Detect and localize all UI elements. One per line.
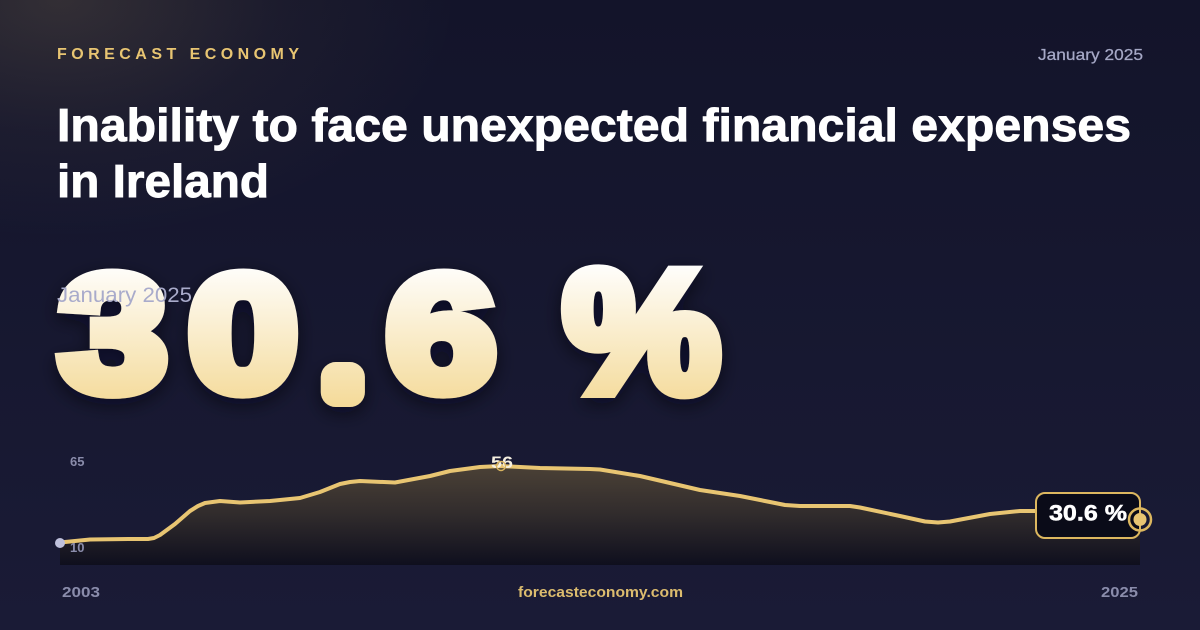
latest value callout [1036,493,1140,538]
latest value callout: 30.6 % [1049,500,1127,526]
y axis max: 65 [70,454,84,469]
sparkline chart [55,453,1151,565]
headline value: % [564,236,720,428]
headline value: . [329,302,357,414]
latest value marker [1129,508,1151,530]
title [57,99,1131,207]
headline value: 6 [386,242,496,425]
y axis min: 10 [70,540,84,555]
overlapping date label: January 2025 [57,284,192,307]
start marker [55,538,65,548]
source url: forecasteconomy.com [518,584,683,601]
date top right: January 2025 [1038,47,1143,64]
chart line [60,466,1040,542]
peak marker [496,462,506,470]
headline value [59,236,720,428]
title: in Ireland [57,155,269,207]
peak label: 56 [491,453,513,472]
title: Inability to face unexpected financial expenses [57,99,1131,151]
start year: 2003 [62,584,100,601]
headline value: 3 [59,243,167,426]
headline value: 0 [188,242,298,425]
brand label: FORECAST ECONOMY [57,46,299,63]
chart area fill [60,466,1140,565]
end year: 2025 [1101,584,1138,601]
